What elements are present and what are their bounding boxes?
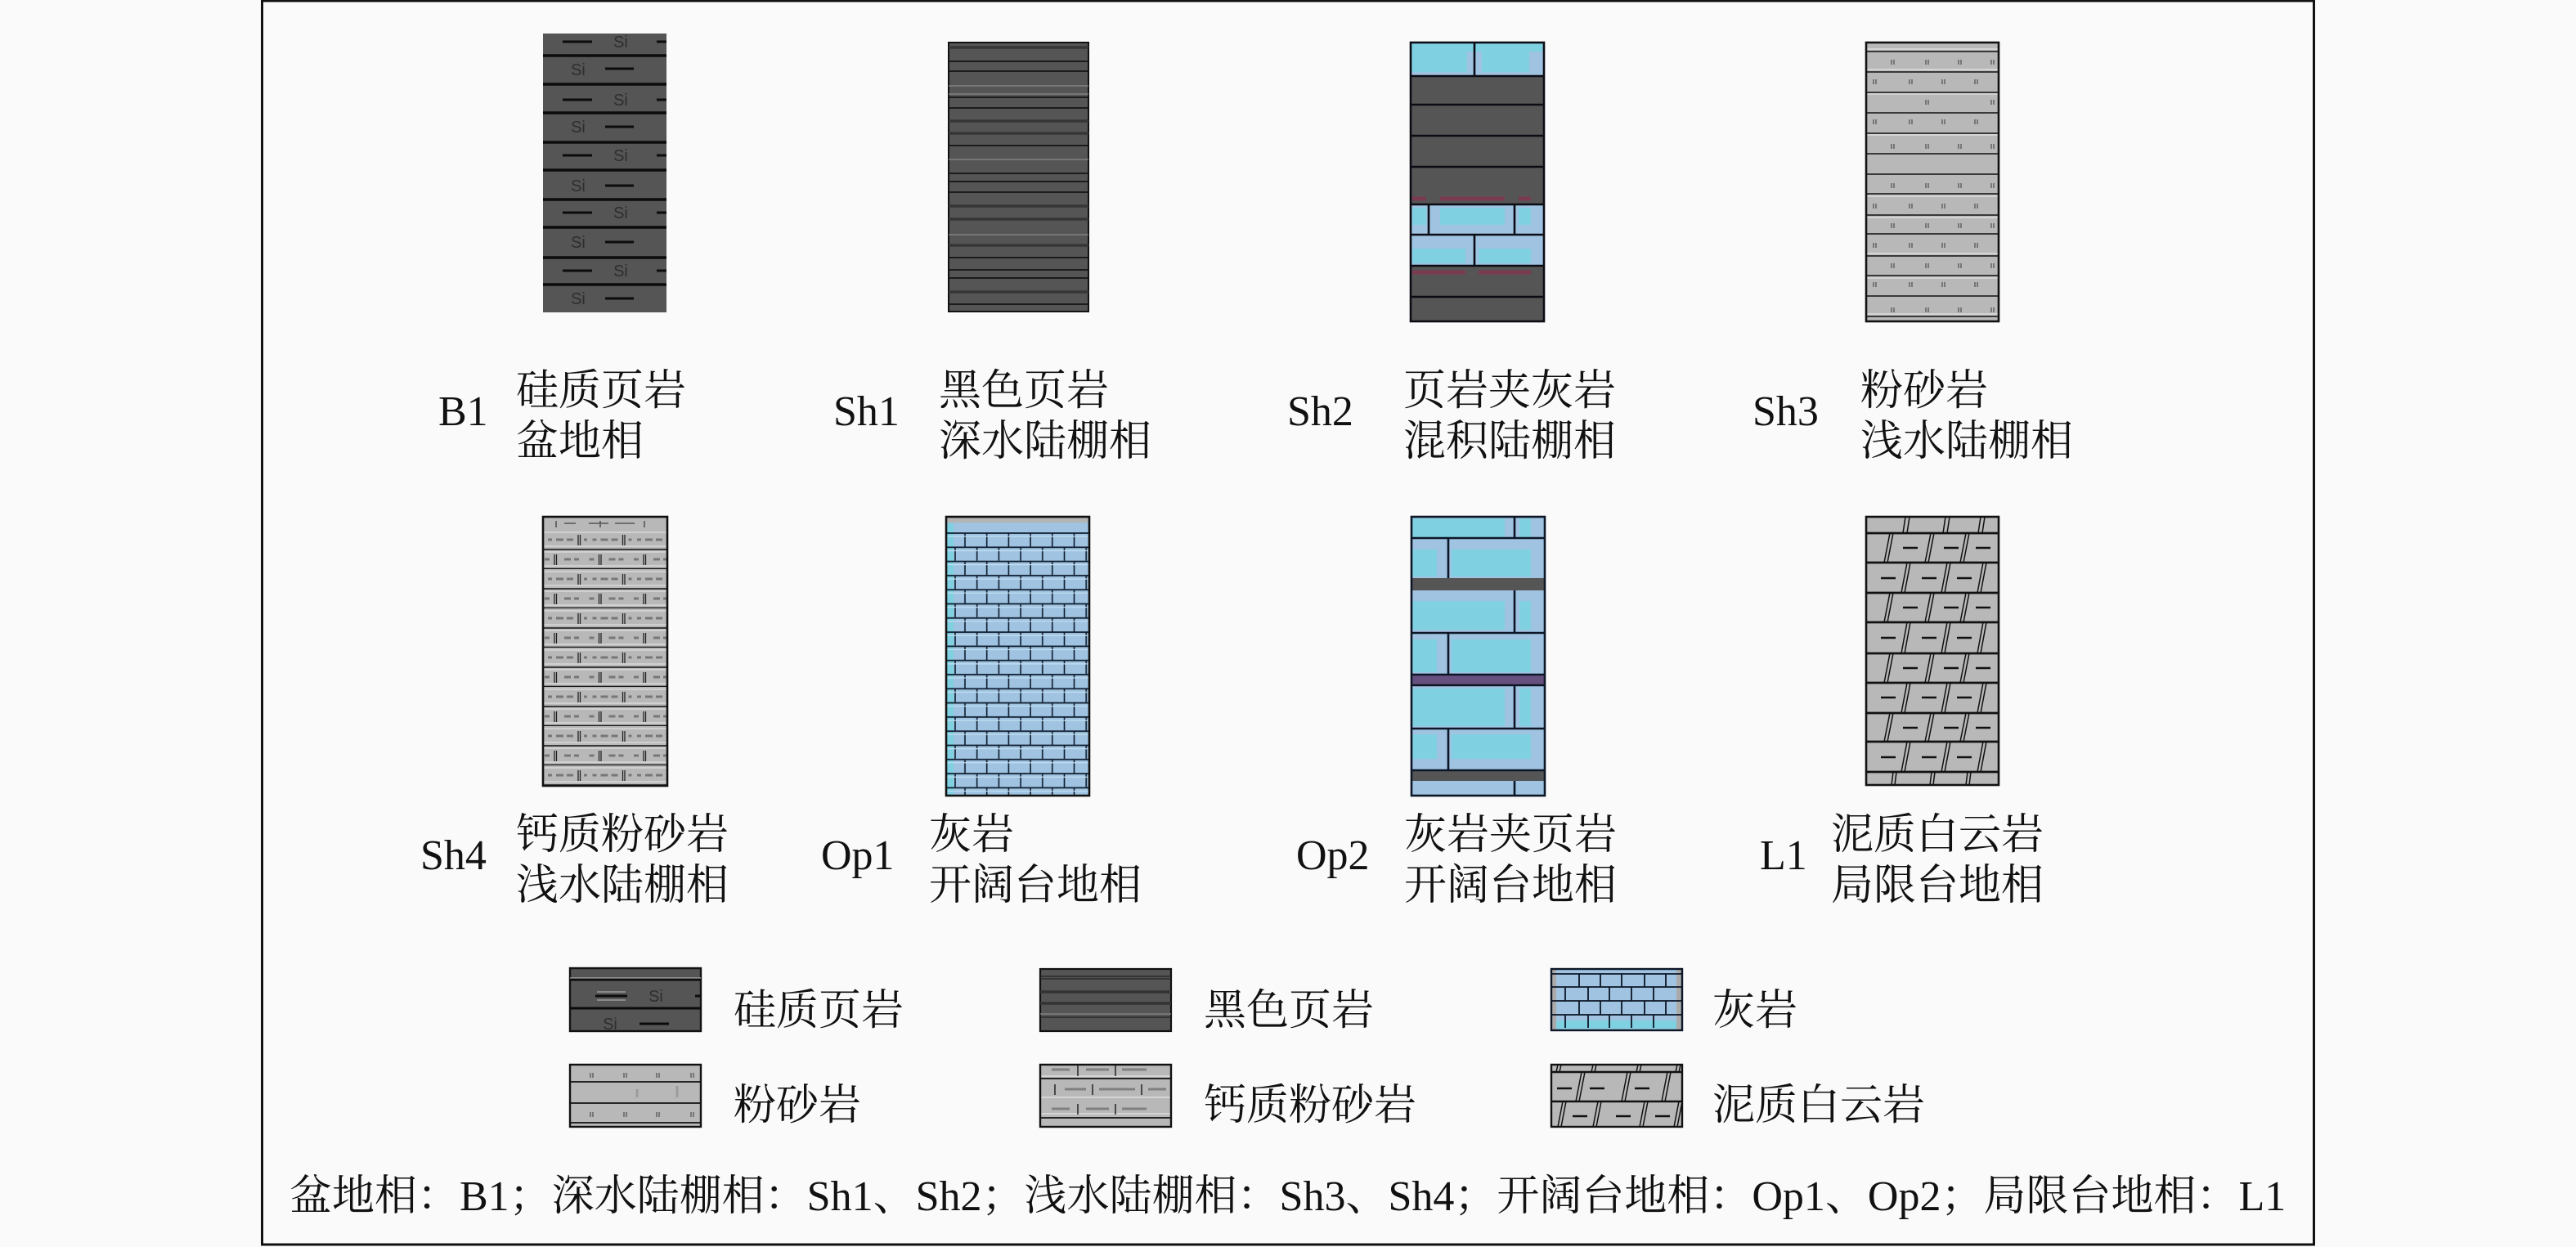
label Op2: Op2 <box>1296 832 1370 879</box>
label Sh2 <box>1287 368 1616 465</box>
label Op1 <box>821 812 1142 909</box>
label B1 <box>438 368 686 465</box>
column L1: argillaceous dolomite <box>1866 517 1999 785</box>
column Op1: limestone <box>946 517 1089 796</box>
legend: siliceous shale <box>570 968 904 1034</box>
legend: siliceous shale: Si <box>648 988 663 1006</box>
label L1: 泥质白云岩 <box>1831 812 2044 859</box>
legend: limestone: 灰岩 <box>1712 988 1797 1034</box>
column Op2: limestone with shale interbeds <box>1411 517 1545 796</box>
frame <box>262 1 2314 1245</box>
label Op1: 灰岩 <box>929 812 1014 859</box>
label Sh4: 钙质粉砂岩 <box>516 812 729 859</box>
column Sh2: shale with limestone interbeds <box>1411 43 1544 321</box>
column B1: siliceous shale: Si <box>571 177 586 195</box>
label Sh2: 混积陆棚相 <box>1403 419 1616 465</box>
footnote: facies summary: 盆地相：B1；深水陆棚相：Sh1、Sh2；浅水陆棚相：Sh3、Sh4；开阔台地相：Op1、Op2；局限台地相：L1 <box>289 1173 2286 1220</box>
column B1: siliceous shale: Si <box>613 34 628 52</box>
legend: calcareous siltstone <box>1040 1065 1416 1129</box>
column B1: siliceous shale: Si <box>571 61 586 79</box>
label Sh4 <box>420 812 729 909</box>
column B1: siliceous shale: Si <box>571 234 586 252</box>
label B1: 盆地相 <box>516 419 644 465</box>
column B1: siliceous shale <box>543 34 666 312</box>
label Sh1: 深水陆棚相 <box>939 419 1151 465</box>
legend: siliceous shale: Si <box>603 1016 617 1034</box>
column Sh3: siltstone <box>1866 43 1999 321</box>
legend: siltstone <box>570 1065 861 1129</box>
label Sh3: Sh3 <box>1752 388 1819 435</box>
legend: siliceous shale: 硅质页岩 <box>734 988 904 1034</box>
column B1: siliceous shale: Si <box>571 290 586 308</box>
label Sh2: Sh2 <box>1287 388 1353 435</box>
label Sh2: 页岩夹灰岩 <box>1403 368 1616 415</box>
label Sh3: 粉砂岩 <box>1860 368 1988 415</box>
label Op2 <box>1296 812 1617 909</box>
label Sh1: Sh1 <box>833 388 900 435</box>
label L1: L1 <box>1760 832 1807 879</box>
label B1: 硅质页岩 <box>516 368 686 415</box>
column B1: siliceous shale: Si <box>571 119 586 137</box>
column Sh1: black shale <box>949 43 1088 312</box>
label L1 <box>1760 812 2044 909</box>
label L1: 局限台地相 <box>1831 863 2044 909</box>
column B1: siliceous shale: Si <box>613 92 628 110</box>
legend: argillaceous dolomite: 泥质白云岩 <box>1712 1083 1925 1129</box>
label Sh4: 浅水陆棚相 <box>516 863 729 909</box>
column Sh4: calcareous siltstone <box>543 517 667 786</box>
legend: siltstone: 粉砂岩 <box>734 1083 861 1129</box>
label Sh4: Sh4 <box>420 832 487 879</box>
legend: black shale <box>1040 969 1374 1034</box>
legend: argillaceous dolomite <box>1551 1065 1925 1129</box>
column B1: siliceous shale: Si <box>613 147 628 165</box>
column B1: siliceous shale: Si <box>613 204 628 222</box>
label Op1: 开阔台地相 <box>929 863 1142 909</box>
legend: calcareous siltstone: 钙质粉砂岩 <box>1204 1083 1416 1129</box>
label Op2: 灰岩夹页岩 <box>1404 812 1617 859</box>
label Sh3 <box>1752 368 2073 465</box>
label Sh1 <box>833 368 1151 465</box>
column B1: siliceous shale: Si <box>613 262 628 280</box>
label Op1: Op1 <box>821 832 895 879</box>
label Op2: 开阔台地相 <box>1404 863 1617 909</box>
legend: limestone <box>1551 969 1797 1034</box>
label B1: B1 <box>438 388 488 435</box>
label Sh3: 浅水陆棚相 <box>1860 419 2073 465</box>
label Sh1: 黑色页岩 <box>939 368 1109 415</box>
legend: black shale: 黑色页岩 <box>1204 988 1374 1034</box>
